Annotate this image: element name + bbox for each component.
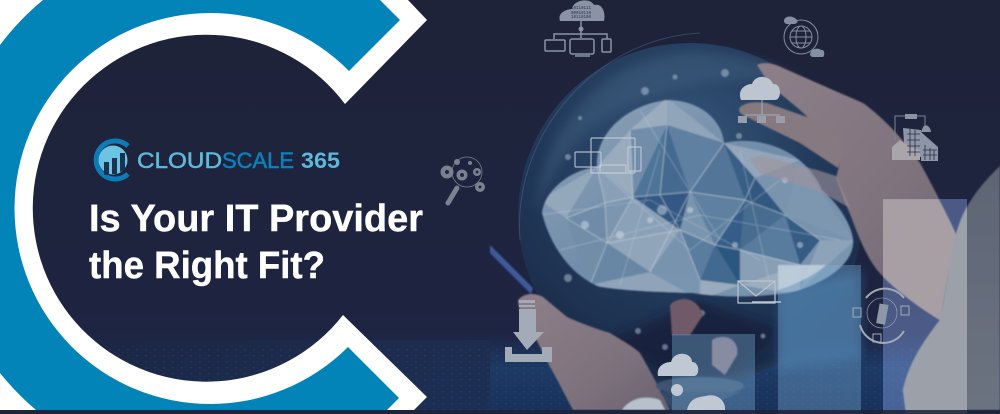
photo: sleeve [903, 166, 1000, 410]
C shape: white outline [0, 0, 427, 410]
C shape: blue band [0, 0, 400, 410]
title: the Right Fit? [89, 245, 325, 287]
middle finger [739, 102, 845, 168]
icon: cloud network: 10110111 [571, 7, 592, 11]
icon: cloud network: 00010110 [571, 12, 592, 16]
bar 3 [883, 199, 967, 414]
bottom strip [0, 410, 1000, 414]
photo: right hand [739, 63, 957, 320]
icon: devices on cloud [575, 138, 641, 173]
icon: buildings [892, 114, 938, 161]
title [89, 198, 423, 287]
photo: polygonal cloud [541, 99, 854, 298]
index finger and palm [757, 63, 957, 320]
logo mark [96, 141, 128, 179]
photo: city lights band [90, 335, 1000, 410]
bar 2 glow [778, 265, 826, 290]
bar chart overlay [672, 199, 967, 414]
icon: envelope [738, 281, 781, 303]
bar 2 [778, 265, 861, 414]
bar 3 highlights over hand and sleeve [883, 199, 967, 414]
icon: gears and magnifier [440, 157, 485, 203]
icon: globe with clouds [784, 17, 824, 57]
icon: cloud network [545, 0, 611, 56]
ring finger through cloud [750, 156, 850, 208]
icon: small cloud with devices [738, 77, 785, 123]
icon: download arrow [505, 300, 552, 362]
photo: data sphere [518, 33, 862, 387]
logo wordmark: SCALE [222, 148, 294, 173]
icon: bottom clouds [658, 354, 725, 410]
photo: left hand and tablet [490, 245, 744, 410]
bar 1 [672, 334, 755, 414]
icon: circular document [853, 289, 909, 343]
title: Is Your IT Provider [89, 198, 423, 240]
logo wordmark: CLOUD [137, 148, 222, 173]
icon: cloud network: 10110100 [571, 16, 592, 20]
logo wordmark: 365 [301, 148, 340, 173]
logo [96, 141, 340, 179]
